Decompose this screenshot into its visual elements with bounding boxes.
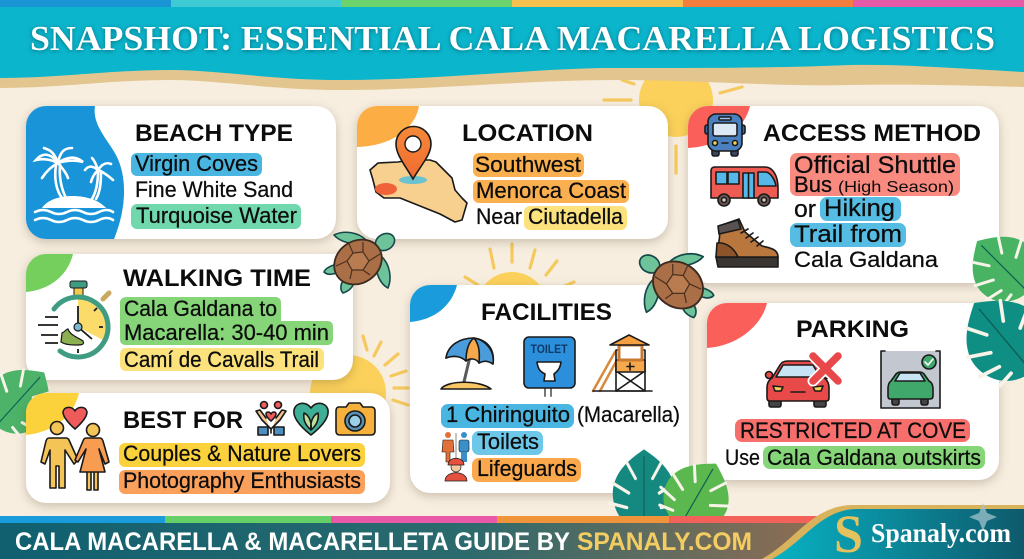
- header band: [0, 0, 1024, 90]
- highlight: lifeguards: Lifeguards: [477, 456, 577, 481]
- highlight: Cala Galdana to Macarella: [120, 296, 333, 345]
- text: or hiking: or: [794, 196, 816, 223]
- leaf: bottom green: [649, 446, 747, 544]
- icon: toilet sign: [524, 337, 575, 396]
- leaf: right teal: [941, 275, 1024, 400]
- colour stripe: [0, 516, 829, 523]
- panel: parking: [707, 303, 999, 480]
- highlight: Cala Galdana to Macarella: Cala Galdana to: [124, 296, 277, 321]
- highlight: chiringuito: [441, 402, 680, 428]
- logo: [762, 503, 1024, 559]
- panel: best for: [26, 393, 390, 503]
- text: near Ciutadella: Near: [476, 204, 522, 229]
- corner blob: [26, 254, 73, 292]
- icon: couple with heart: [41, 407, 109, 490]
- panel: walking time: [26, 254, 353, 380]
- highlight: toilets: Toilets: [477, 429, 539, 454]
- icon: camera: [336, 403, 375, 435]
- highlight: Cala Galdana to Macarella: Macarella: 30-40 min: [124, 320, 329, 345]
- footer brand: SPANALY.COM: [577, 528, 752, 556]
- sun: top right: [604, 63, 742, 173]
- icon: stopwatch: [38, 281, 109, 357]
- highlight: restricted: RESTRICTED AT COVE: [740, 418, 966, 443]
- icon: restroom figures: [442, 432, 469, 462]
- turtle: right: [636, 251, 714, 318]
- text: near Ciutadella: [476, 204, 627, 230]
- heading: BEACH TYPE: [135, 120, 293, 147]
- leaf: top right: [952, 216, 1024, 317]
- text: or hiking: [794, 195, 901, 223]
- text: Fine White Sand: [135, 177, 293, 202]
- icon: lifeguard tower: [593, 335, 652, 391]
- panel: beach type: [26, 106, 336, 239]
- corner blob: [410, 285, 457, 322]
- highlight: official shuttle bus: Bus: [794, 172, 832, 197]
- heading: ACCESS METHOD: [763, 120, 981, 147]
- text: Cala Galdana: Cala Galdana: [794, 247, 939, 272]
- icon: toilet sign: TOILET: [530, 342, 568, 356]
- title: SNAPSHOT: ESSENTIAL CALA MACARELLA LOGISTICS: [30, 19, 995, 58]
- highlight: southwest: Southwest: [475, 152, 581, 177]
- footer: [0, 503, 1024, 559]
- highlight: trail from: Trail from: [794, 221, 902, 248]
- icon: red car with cross: [766, 356, 838, 407]
- highlight: official shuttle bus: [790, 152, 960, 197]
- footer text: CALA MACARELLA & MACARELLETA GUIDE BY: [15, 528, 570, 556]
- highlight: official shuttle bus: Official Shuttle: [794, 152, 956, 179]
- colour stripe: [0, 0, 1024, 7]
- leaf: bottom teal: [610, 449, 678, 530]
- icon: hiking boot: [716, 219, 778, 267]
- heading: BEST FOR: [123, 407, 243, 434]
- text: use outskirts: Cala Galdana outskirts: [767, 445, 981, 470]
- sun: lower left: [310, 336, 408, 431]
- highlight: photography: Photography Enthusiasts: [123, 468, 361, 493]
- icon: palm island: [35, 148, 113, 222]
- highlight: chiringuito: (Macarella): [577, 402, 680, 427]
- highlight: turquoise water: Turquoise Water: [136, 203, 297, 228]
- icon: lifeguard figure: [445, 458, 467, 481]
- text: use outskirts: Use: [725, 445, 760, 470]
- highlight: couples: Couples & Nature Lovers: [123, 441, 361, 466]
- heading: FACILITIES: [481, 299, 612, 326]
- heading: LOCATION: [462, 120, 593, 147]
- logo: Spanaly.com: [871, 518, 1011, 548]
- icon: permitted parking bay: [881, 351, 940, 408]
- highlight: menorca coast: Menorca Coast: [476, 178, 626, 203]
- text: or hiking: Hiking: [824, 195, 895, 222]
- highlight: Camí de Cavalls Trail: Camí de Cavalls Trail: [124, 347, 319, 372]
- icon: beach umbrella: [441, 338, 493, 389]
- corner blob: [707, 303, 767, 348]
- panel: access method: [688, 106, 999, 283]
- text: near Ciutadella: Ciutadella: [528, 204, 624, 229]
- corner blob: [357, 106, 419, 147]
- corner blob: [26, 393, 79, 435]
- panel: facilities: [410, 285, 689, 493]
- highlight: virgin coves: Virgin Coves: [135, 151, 258, 176]
- turtle: left: [324, 230, 398, 294]
- icon: hands and hearts: [256, 402, 286, 435]
- icon: leaf heart: [294, 403, 328, 435]
- icon: shuttle bus side: [711, 167, 778, 206]
- highlight: official shuttle bus: (High Season): [838, 179, 954, 196]
- heading: PARKING: [796, 316, 909, 343]
- sun: centre: [449, 244, 574, 344]
- corner blob: [688, 106, 750, 148]
- heading: WALKING TIME: [123, 265, 311, 292]
- leaf: left: [0, 350, 70, 449]
- panel: location: [357, 106, 668, 239]
- icon: Menorca map and pin: [370, 127, 467, 222]
- icon: island background blob: [26, 106, 124, 239]
- highlight: chiringuito: 1 Chiringuito: [446, 402, 570, 427]
- icon: bus front: [705, 114, 745, 156]
